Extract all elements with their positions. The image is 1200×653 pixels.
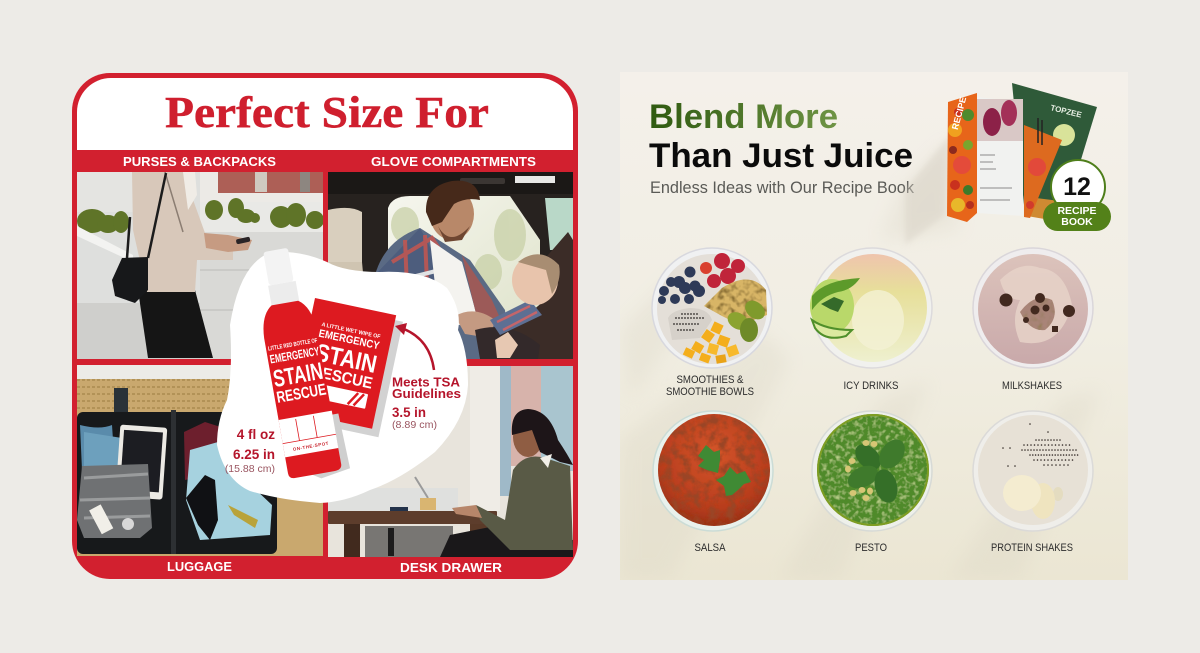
book front strip xyxy=(947,93,977,222)
toppings xyxy=(700,253,745,288)
header: white title area xyxy=(77,78,573,150)
bowl: icy drink xyxy=(810,248,932,368)
book fruit insert xyxy=(1024,125,1062,218)
label: salsa: SALSA xyxy=(694,542,726,554)
chocolate pieces xyxy=(1000,293,1075,332)
badge pill xyxy=(1043,202,1111,231)
recipe book: RECIPE xyxy=(950,96,968,131)
callout: bottle size: (15.88 cm) xyxy=(225,463,275,475)
smoothie base xyxy=(657,254,767,364)
callout: TSA guidelines: 3.5 in xyxy=(392,405,426,420)
cream swirls xyxy=(1000,266,1072,343)
label: luggage: LUGGAGE xyxy=(167,559,232,574)
badge text: RECIPE xyxy=(1057,205,1097,217)
label: glove compartments: GLOVE COMPARTMENTS xyxy=(371,154,536,169)
ice highlight xyxy=(852,290,904,350)
photo: open suitcase on rug xyxy=(77,365,323,556)
salsa xyxy=(658,414,770,526)
callout: bottle size: 4 fl oz xyxy=(237,427,275,442)
bottle body xyxy=(259,298,342,479)
label: desk drawer: DESK DRAWER xyxy=(400,560,503,575)
product: spray bottle: STAIN xyxy=(271,358,325,393)
recipe book: BOOK xyxy=(1061,216,1093,228)
panel background xyxy=(620,391,1128,580)
bottle label band xyxy=(279,411,338,457)
callout: TSA guidelines: Guidelines xyxy=(392,386,461,401)
cocoa dusting xyxy=(1020,298,1055,330)
product: spray bottle: ON-THE-SPOT xyxy=(292,441,329,452)
label: smoothies: SMOOTHIES & xyxy=(676,374,744,386)
heading xyxy=(649,103,912,168)
panel: perfect size for xyxy=(72,73,578,579)
heading line one: Blend More xyxy=(649,98,838,136)
white blob behind products xyxy=(217,252,468,503)
title: Perfect Size For xyxy=(165,88,489,137)
packet shadow xyxy=(297,305,403,437)
label: icy drinks: ICY DRINKS xyxy=(844,380,898,392)
card frame xyxy=(72,73,578,579)
label: pesto: PESTO xyxy=(855,542,887,554)
window shadows xyxy=(630,202,951,420)
callout: TSA guidelines xyxy=(392,374,461,431)
book pages xyxy=(977,141,1023,216)
label: purses and backpacks: PURSES & BACKPACKS xyxy=(123,154,276,169)
basil and pine nuts xyxy=(844,435,910,505)
label: protein shakes: PROTEIN SHAKES xyxy=(991,542,1073,554)
label: smoothies xyxy=(666,376,754,395)
bowl: smoothie bowl xyxy=(652,248,772,368)
chia seeds xyxy=(1003,424,1080,466)
badge circle xyxy=(1050,159,1106,203)
photo: woman at desk xyxy=(328,366,573,557)
callout: TSA guidelines: Meets TSA xyxy=(392,374,461,390)
bottle shadow xyxy=(303,413,351,480)
badge number: 12 xyxy=(1063,173,1091,201)
pesto xyxy=(817,414,929,526)
callout: bottle size xyxy=(225,427,275,475)
recipe book xyxy=(905,83,1111,245)
glass rim xyxy=(652,248,772,368)
product: wet wipe packet xyxy=(289,298,404,437)
book back cover xyxy=(1012,83,1097,204)
cilantro xyxy=(698,445,751,496)
packet text: A LITTLE WET WIPE OF xyxy=(321,322,381,340)
product: wet wipe packet: EMERGENCY xyxy=(317,328,381,352)
recipe book: TOPZEE xyxy=(1050,103,1083,120)
arrow: to packet xyxy=(395,323,434,370)
label: milkshakes: MILKSHAKES xyxy=(1002,380,1062,392)
panel: blend more than just juice xyxy=(620,72,1128,580)
label: smoothies: SMOOTHIE BOWLS xyxy=(666,386,754,398)
bottle text: LITTLE RED BOTTLE OF xyxy=(268,338,318,353)
callout: TSA guidelines: (8.89 cm) xyxy=(392,419,437,431)
bottle cap xyxy=(263,248,294,286)
bowl: milkshake xyxy=(973,248,1093,368)
lime xyxy=(810,278,860,338)
packet body xyxy=(291,298,396,429)
product: spray bottle xyxy=(249,244,351,484)
product: spray bottle: EMERGENCY xyxy=(269,344,320,366)
product: wet wipe packet: STAIN xyxy=(313,339,379,379)
subheading: Endless Ideas with Our Recipe Book xyxy=(650,179,915,197)
heading line two: Than Just Juice xyxy=(649,137,913,175)
bowl: pesto xyxy=(812,411,932,531)
book shadow xyxy=(905,135,950,245)
banana slices xyxy=(1003,475,1063,519)
photo: man and child in car xyxy=(328,172,573,360)
product: spray bottle: RESCUE xyxy=(275,381,328,407)
bowl: protein shake xyxy=(973,411,1093,531)
photo: woman with purse xyxy=(77,172,324,359)
callout: bottle size: 6.25 in xyxy=(233,447,275,462)
product: wet wipe packet: RESCUE xyxy=(310,363,374,393)
bowl: salsa xyxy=(653,411,773,531)
